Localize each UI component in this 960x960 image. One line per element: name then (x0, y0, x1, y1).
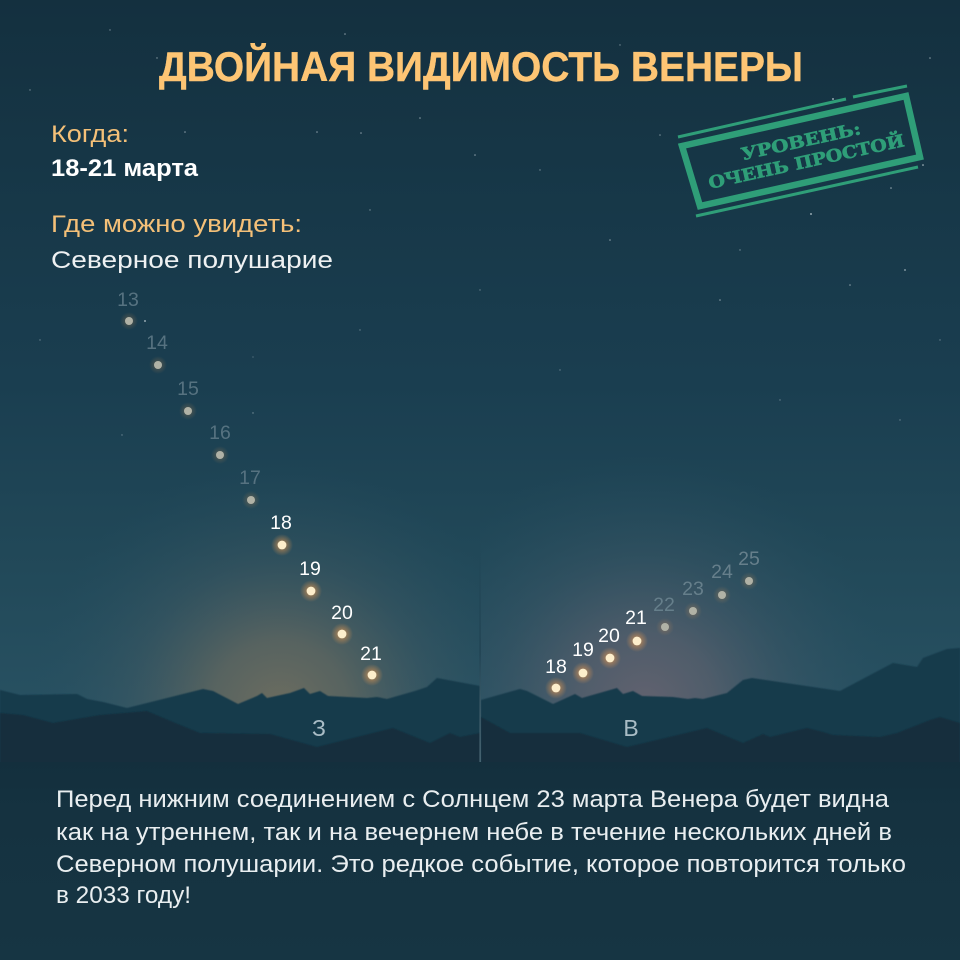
west direction label: З (312, 715, 326, 741)
title: ДВОЙНАЯ ВИДИМОСТЬ ВЕНЕРЫ (159, 42, 803, 90)
stars (29, 29, 941, 436)
west track: Venus positions 13–21: 18 (270, 512, 292, 534)
east direction label: В (623, 715, 639, 741)
mountains: east panel, far ridge (481, 648, 960, 770)
description paragraph: как на утреннем, так и на вечернем небе в течение нескольких дней в (56, 819, 892, 846)
mountains: east panel, near ridge (481, 717, 960, 770)
east track: Venus positions 18–25: 18 (545, 656, 567, 678)
stamp: difficulty level (678, 86, 920, 216)
east track: Venus positions 18–25: 23 (682, 578, 704, 600)
west track: Venus positions 13–21: 17 (239, 467, 261, 489)
east track: Venus positions 18–25: 21 (625, 607, 647, 629)
east track: Venus positions 18–25: 25 (738, 548, 760, 570)
east track: Venus positions 18–25: 19 (572, 639, 594, 661)
west track: Venus positions 13–21: 13 (117, 289, 139, 311)
horizon glow: west (30, 460, 480, 764)
background: night sky (0, 0, 960, 764)
east track: Venus positions 18–25: 24 (711, 561, 733, 583)
stamp: difficulty level: ОЧЕНЬ ПРОСТОЙ (706, 129, 906, 194)
west track: Venus positions 13–21: 19 (299, 558, 321, 580)
horizon glow: east (480, 455, 895, 764)
when: label: Когда: (51, 121, 129, 148)
description paragraph: в 2033 году! (56, 882, 191, 909)
mountains: west panel, near ridge (0, 711, 480, 770)
east track: Venus positions 18–25: 22 (653, 594, 675, 616)
description paragraph: Северном полушарии. Это редкое событие, которое повторится только (56, 851, 906, 878)
where: region: Северное полушарие (51, 247, 333, 274)
east track: Venus positions 18–25: 20 (598, 625, 620, 647)
west track: Venus positions 13–21: 21 (360, 643, 382, 665)
stamp: difficulty level: УРОВЕНЬ: (739, 119, 863, 165)
when: dates: 18-21 марта (51, 155, 199, 182)
description paragraph (56, 786, 906, 909)
west track: Venus positions 13–21: 14 (146, 332, 168, 354)
west track: Venus positions 13–21: 15 (177, 378, 199, 400)
west track: Venus positions 13–21: 20 (331, 602, 353, 624)
description paragraph: Перед нижним соединением с Солнцем 23 марта Венера будет видна (56, 786, 890, 813)
where: label: Где можно увидеть: (51, 211, 302, 238)
divider between west and east (480, 540, 481, 762)
west track: Venus positions 13–21: 16 (209, 422, 231, 444)
mountains: west panel, far ridge (0, 678, 480, 770)
east track: Venus positions 18–25 (545, 548, 760, 699)
west track: Venus positions 13–21 (117, 289, 383, 686)
ground and text band (0, 762, 960, 960)
